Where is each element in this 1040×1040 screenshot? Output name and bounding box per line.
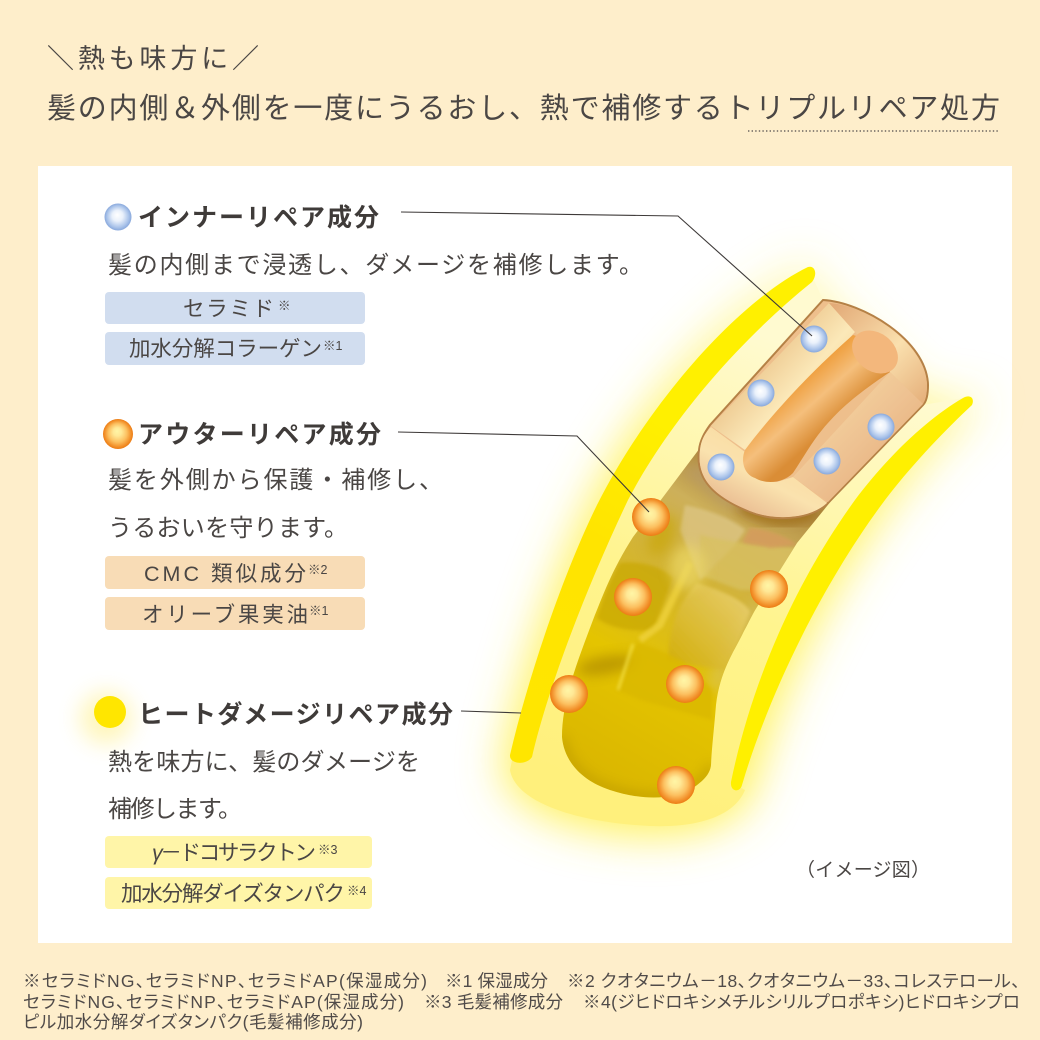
chip: olive oil: オリーブ果実油 [142,603,308,627]
description [108,749,420,823]
footnotes [23,971,1020,1032]
dotted underline [748,130,999,132]
description: 熱を味方に、髪のダメージを [108,749,420,776]
footnotes: ※セラミドNG、セラミドNP、セラミドAP(保湿成分) [23,971,427,991]
description: 髪の内側まで浸透し、ダメージを補修します。 [108,252,643,279]
chip: hydrolyzed collagen: ※1 [323,339,343,353]
footnotes: ※3 毛髪補修成分 [424,992,564,1012]
tube outline [698,300,928,518]
chip: gamma-docosalactone: ※3 [318,843,338,857]
header [47,44,1000,131]
chip: olive oil [105,597,365,630]
heading: ヒートダメージリペア成分 [138,700,453,729]
footnotes: セラミドNG、セラミドNP、セラミドAP(保湿成分) [23,992,404,1012]
left cuticle strip [510,267,815,763]
hair tip cross section [698,300,928,518]
description: うるおいを守ります。 [108,515,348,542]
chip: olive oil: ※1 [309,604,329,618]
description [108,467,443,542]
eyebrow: 熱も味方に: ＼熱も味方に／ [47,44,259,74]
hair glow [510,267,972,828]
inner repair particles [708,326,894,480]
leader lines [398,212,812,713]
hair core scales [562,450,830,798]
footnotes: ※2 クオタニウム－18、クオタニウム－33、コレステロール、 [567,971,1020,991]
chip: hydrolyzed collagen [105,332,365,365]
chip: ceramide: ※ [278,299,291,313]
bottom U section [699,427,827,517]
footnotes: ※1 保湿成分 [445,971,548,991]
section: outer repair [103,419,443,630]
chip: hydrolyzed soy protein: 加水分解ダイズタンパク [121,882,345,906]
medulla core [743,335,890,482]
chip: ceramide: セラミド [183,297,274,321]
chip: gamma-docosalactone [105,836,372,868]
icon: yellow glow dot [80,692,132,744]
chip: hydrolyzed soy protein: ※4 [347,884,367,898]
medulla end [844,322,906,382]
hair core [562,432,840,798]
panel: white content area [38,166,1012,943]
chip: CMC: ※2 [308,563,328,577]
chip: CMC [105,556,365,589]
footnotes: ピル加水分解ダイズタンパク(毛髪補修成分) [23,1012,363,1032]
heading: インナーリペア成分 [138,204,379,232]
chip: gamma-docosalactone: γ－ドコサラクトン [152,841,316,865]
right cuticle strip [731,396,973,790]
section: inner repair [104,204,643,365]
image caption: （イメージ図） [796,859,930,881]
upper right section [829,303,927,404]
upper left section [711,303,855,450]
lower right section [793,372,923,502]
illustration: hair cross section [510,267,973,828]
section: heat damage repair [80,692,453,909]
footnotes: ※4(ジヒドロキシメチルシリルプロポキシ)ヒドロキシプロ [583,992,1020,1012]
icon: blue sphere [104,204,132,230]
description: 補修します。 [108,796,242,823]
icon: orange sphere [103,419,133,449]
chip: hydrolyzed collagen: 加水分解コラーゲン [129,337,322,361]
description: 髪を外側から保護・補修し、 [108,467,443,494]
outer repair particles [550,498,788,804]
chip: ceramide [105,292,365,324]
chip: CMC: CMC 類似成分 [144,562,306,586]
chip: hydrolyzed soy protein [105,877,372,909]
main title: 髪の内側＆外側を一度にうるおし、熱で補修するトリプルリペア処方 [47,92,1000,125]
hair pale outer band [510,267,963,826]
heading: アウターリペア成分 [138,421,381,449]
